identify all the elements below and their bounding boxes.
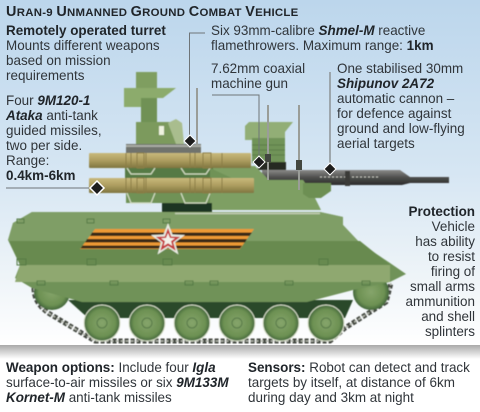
turret body bbox=[162, 166, 331, 212]
text: automatic cannon: for defence against bbox=[337, 106, 452, 121]
text: protection: to resist bbox=[428, 249, 475, 264]
text: ataka missiles: Ataka anti-tank bbox=[5, 108, 98, 123]
leader: coaxial machine gun bbox=[212, 95, 265, 168]
St George ribbon bbox=[80, 229, 254, 249]
text: ataka missiles: Four 9M120-1 bbox=[6, 93, 90, 108]
text: automatic cannon: Shipunov 2A72 bbox=[337, 76, 435, 91]
red star bbox=[151, 223, 185, 254]
leader: cannon bbox=[324, 72, 336, 175]
rear sensor block bbox=[245, 122, 293, 170]
text: sensors: Sensors: Robot can detect and track bbox=[248, 360, 470, 375]
hub caps bbox=[97, 318, 331, 328]
missile launcher mount bbox=[125, 165, 236, 203]
lower hull shadow bbox=[68, 300, 353, 318]
text: weapon options: Weapon options: Include four Igla bbox=[6, 360, 216, 375]
upper missile tube bbox=[89, 153, 251, 168]
text: protection bbox=[406, 204, 475, 339]
text: automatic cannon bbox=[337, 61, 465, 151]
text: flamethrowers: flamethrowers. Maximum range: 1km bbox=[211, 38, 434, 53]
text: protection: Vehicle bbox=[432, 219, 475, 234]
hull bbox=[8, 212, 406, 302]
text: protection: firing of bbox=[431, 264, 475, 279]
text: remotely operated turret: Remotely operated turret bbox=[6, 23, 166, 38]
turret sensor mast bbox=[124, 72, 201, 153]
text: automatic cannon: ground and low-flying bbox=[337, 121, 465, 136]
text: ataka missiles: guided missiles, bbox=[6, 123, 102, 138]
leader: missiles bbox=[6, 181, 104, 195]
text: flamethrowers bbox=[211, 23, 434, 53]
text: weapon options: surface-to-air missiles or six 9M133M bbox=[6, 375, 229, 390]
text: protection: Protection bbox=[409, 204, 475, 219]
text: coaxial machine gun: machine gun bbox=[211, 76, 288, 91]
text: remotely operated turret: based on mission bbox=[6, 53, 111, 68]
text: coaxial machine gun bbox=[211, 61, 305, 91]
text: weapon options bbox=[6, 360, 229, 405]
title: URAN-9 UNMANNED GROUND COMBAT VEHICLE bbox=[6, 4, 299, 20]
antenna blocks bbox=[265, 154, 302, 170]
text: coaxial machine gun: 7.62mm coaxial bbox=[211, 61, 305, 76]
text: sensors: targets by itself, at distance of 6km bbox=[248, 375, 455, 390]
text: protection: splinters bbox=[425, 324, 475, 339]
hull rivets and brackets bbox=[17, 219, 370, 285]
text: sensors: during day and 3km at night bbox=[248, 390, 414, 405]
text: flamethrowers: Six 93mm-calibre Shmel-M reactive bbox=[211, 23, 425, 38]
text: automatic cannon: automatic cannon – bbox=[337, 91, 455, 106]
tracks bbox=[34, 283, 391, 341]
illustration: unmanned combat vehicle bbox=[8, 72, 449, 341]
text: weapon options: Kornet-M anti-tank missiles bbox=[6, 390, 172, 405]
text: ataka missiles: Range: bbox=[6, 153, 49, 168]
text: protection: ammunition bbox=[406, 294, 475, 309]
text: protection: has ability bbox=[415, 234, 475, 249]
text: remotely operated turret: Mounts different weapons bbox=[6, 38, 160, 53]
lower missile tube bbox=[89, 178, 254, 193]
leader: flamethrowers bbox=[184, 33, 205, 147]
text: ataka missiles: 0.4km-6km bbox=[6, 168, 76, 183]
road wheels bbox=[84, 305, 344, 341]
text: automatic cannon: aerial targets bbox=[337, 136, 415, 151]
antenna rods bbox=[197, 88, 299, 190]
text: ataka missiles: two per side. bbox=[6, 138, 82, 153]
text: automatic cannon: One stabilised 30mm bbox=[337, 61, 463, 76]
rear and front sprockets bbox=[34, 274, 389, 310]
text: sensors bbox=[248, 360, 470, 405]
text: protection: small arms bbox=[410, 279, 475, 294]
text: protection: and shell bbox=[421, 309, 475, 324]
cannon bbox=[262, 170, 449, 186]
text: remotely operated turret: requirements bbox=[6, 68, 85, 83]
text: ataka missiles bbox=[5, 93, 102, 183]
text: remotely operated turret bbox=[6, 23, 166, 83]
